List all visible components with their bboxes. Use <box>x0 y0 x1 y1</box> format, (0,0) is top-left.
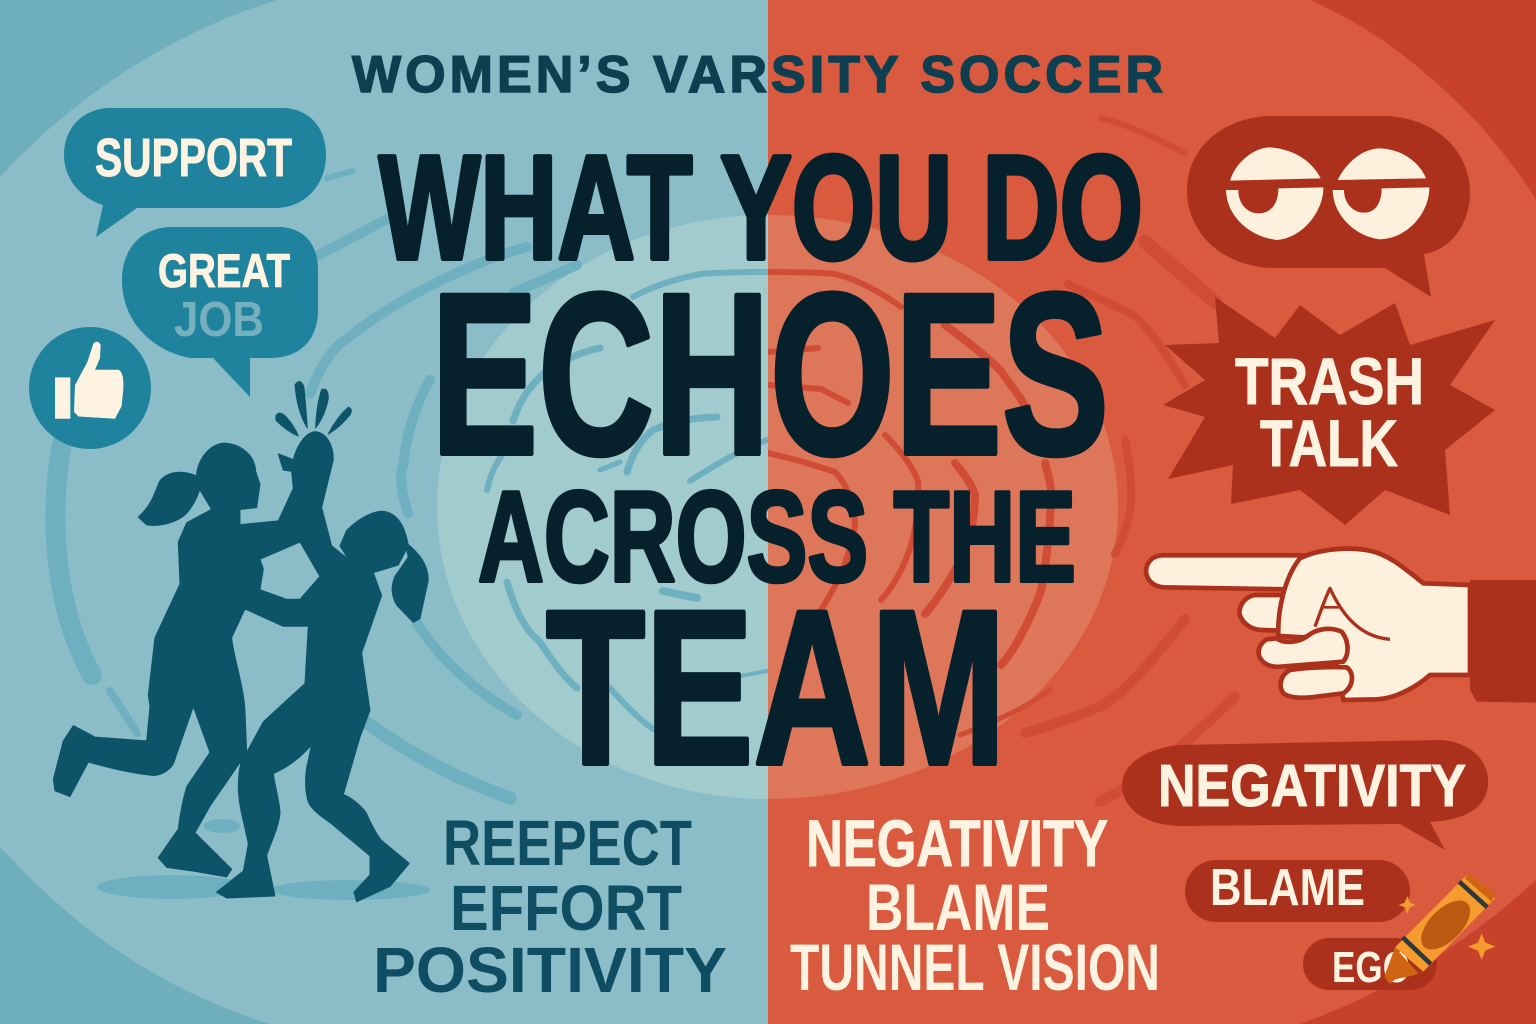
crayon end cap <box>1465 873 1495 902</box>
icon: pointing hand <box>1146 549 1536 703</box>
starburst: trash talk: TRASH <box>1235 344 1424 418</box>
word stack: negativity blame tunnel vision: TUNNEL VISION <box>790 930 1160 1004</box>
pill: ego: EGO <box>1332 943 1410 992</box>
icon: left half-lidded eye <box>1226 147 1323 240</box>
middle finger <box>1239 595 1283 631</box>
background: left blue half with echo rings <box>0 0 768 1024</box>
title line: team: TEAM <box>546 564 1006 810</box>
little finger <box>1281 667 1352 698</box>
speech bubble: support: SUPPORT <box>95 128 292 188</box>
ring finger <box>1259 629 1348 667</box>
high-five impact marks <box>276 382 351 436</box>
title line: across the: ACROSS THE <box>478 465 1076 609</box>
icon: thumbs up <box>29 327 151 449</box>
players high-five silhouette <box>53 382 428 902</box>
word stack: respect effort positivity: REEPECT <box>443 807 692 879</box>
pill: negativity: NEGATIVITY <box>1158 753 1466 819</box>
title line: echoes: ECHOES <box>431 246 1109 502</box>
crayon bands <box>1403 882 1487 964</box>
speech bubble: great job: JOB <box>174 293 264 347</box>
word stack: respect effort positivity <box>373 807 727 1006</box>
sleeve <box>1470 580 1536 703</box>
title line: what you do: WHAT YOU DO <box>379 126 1143 290</box>
index finger <box>1146 555 1307 589</box>
speech bubble: rolling eyes <box>1187 116 1470 297</box>
crayon tip <box>1384 947 1418 984</box>
icon: right half-lidded eye <box>1333 148 1429 239</box>
pill: ego <box>1303 938 1437 992</box>
palm and thumb <box>1278 549 1470 700</box>
ponytail: left player <box>138 472 200 525</box>
icon: crayon with sparkles <box>1384 873 1495 984</box>
speech bubble: great job: GREAT <box>158 244 290 297</box>
word stack: respect effort positivity: EFFORT <box>450 872 682 944</box>
silhouette: two players <box>53 432 409 902</box>
heading: women's varsity soccer: WOMEN’S VARSITY SOCCER <box>352 46 1163 104</box>
ponytail: right player <box>392 542 428 622</box>
crayon body <box>1395 873 1495 972</box>
word stack: negativity blame tunnel vision: BLAME <box>866 870 1050 944</box>
thumb crease <box>1315 588 1390 639</box>
word stack: negativity blame tunnel vision <box>790 806 1160 1004</box>
crayon label oval <box>1413 892 1479 958</box>
title <box>379 126 1143 810</box>
starburst: trash talk: TALK <box>1260 406 1398 480</box>
starburst: trash talk <box>1163 297 1495 525</box>
speech bubble: great job <box>122 227 318 397</box>
word stack: negativity blame tunnel vision: NEGATIVITY <box>806 806 1108 880</box>
word stack: respect effort positivity: POSITIVITY <box>373 934 727 1006</box>
sparkles <box>1399 896 1495 960</box>
background: right red half with echo rings <box>768 0 1536 1024</box>
pill: blame: BLAME <box>1210 859 1365 917</box>
speech bubble: support <box>64 108 326 237</box>
pill: negativity <box>1122 740 1488 850</box>
